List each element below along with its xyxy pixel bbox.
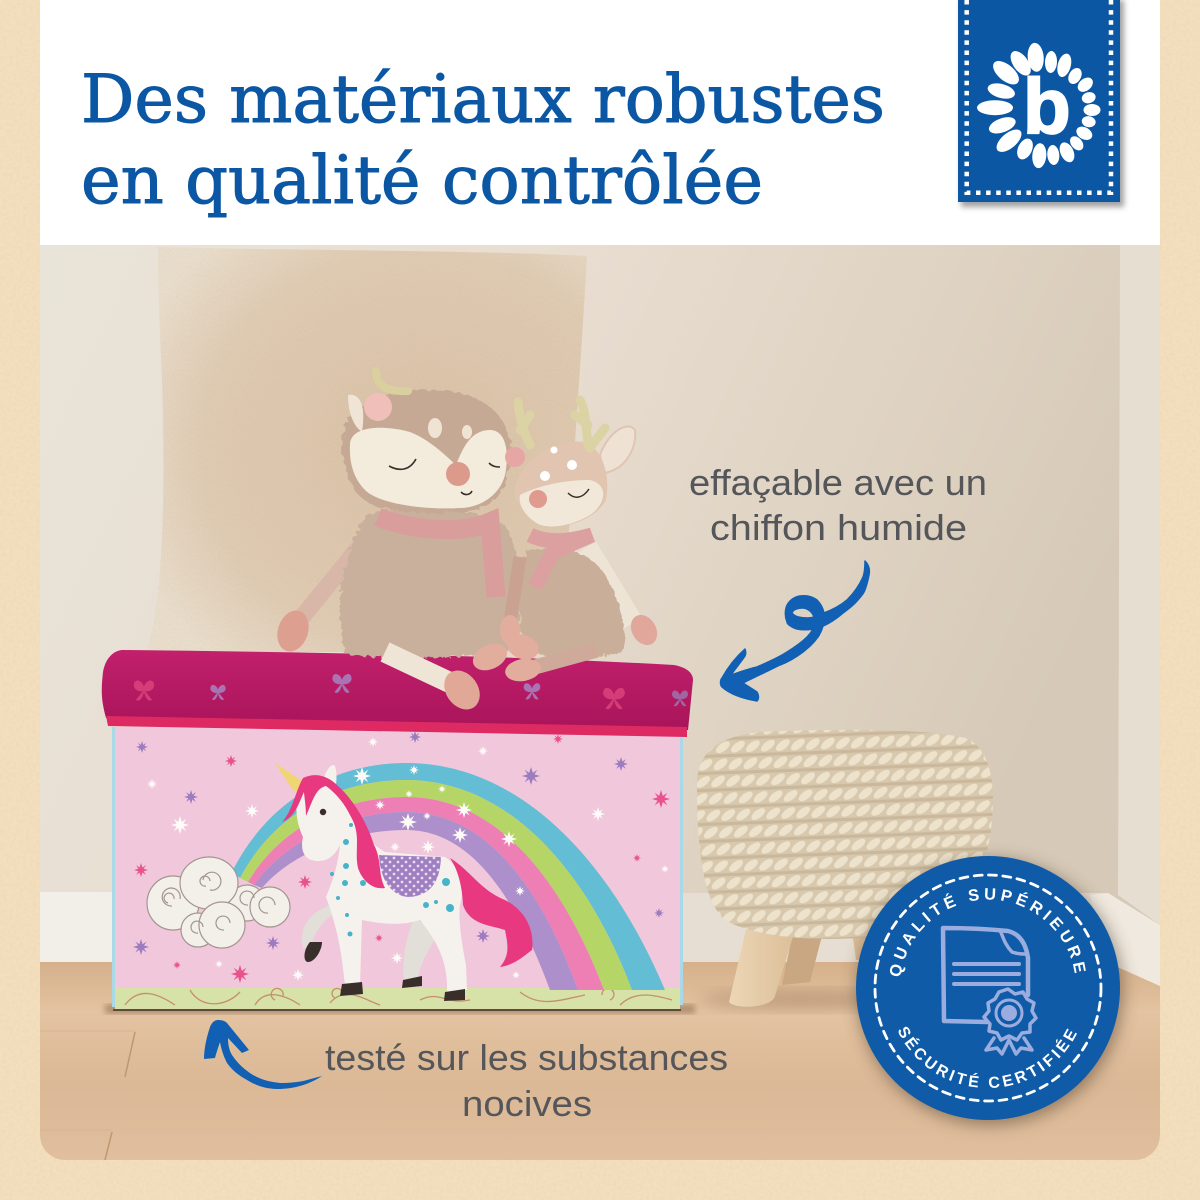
left ear (348, 395, 363, 432)
wall (40, 245, 1160, 965)
certificate icon (943, 928, 1036, 1054)
body (520, 548, 624, 658)
right side wall (1118, 245, 1160, 925)
ear (324, 765, 336, 784)
spots (540, 446, 577, 481)
body spots (330, 823, 454, 936)
butterflies (134, 674, 688, 709)
storage box (102, 650, 693, 1011)
title (81, 61, 885, 219)
feet (469, 615, 543, 684)
horn (275, 763, 302, 792)
scarf (378, 517, 496, 597)
logo letter b: b (1023, 62, 1071, 150)
side flower (505, 447, 525, 467)
left paw (277, 610, 309, 652)
box green ground strip (113, 988, 681, 1011)
cloud (147, 857, 290, 948)
right paw (626, 610, 662, 650)
tail (450, 858, 533, 967)
wooden floor (40, 962, 1160, 1160)
foot (444, 670, 480, 710)
skirting boards (40, 892, 1160, 986)
leg (385, 652, 455, 685)
mane (282, 775, 385, 888)
leg (535, 650, 597, 667)
dashed ring (875, 875, 1101, 1101)
stars (147, 737, 669, 981)
caption: wipeable: effaçable avec un (689, 462, 987, 503)
caption: tested: nocives (462, 1083, 592, 1124)
logo sunburst petals (977, 42, 1100, 169)
pouf stool (697, 730, 993, 1009)
right arm (587, 547, 633, 623)
lid trim (106, 716, 687, 737)
face (350, 428, 507, 508)
title: Des matériaux robustes (81, 61, 885, 138)
photo scene (40, 245, 1160, 1160)
unicorn body (296, 779, 467, 992)
badge text top: QUALITÉ SUPÉRIEURE (890, 888, 1086, 976)
stool legs (729, 925, 870, 1007)
head spots (428, 418, 472, 439)
quality badge shadow (857, 859, 1123, 1125)
left arm (296, 542, 354, 622)
head (342, 390, 511, 513)
arrow: towards box lid (720, 561, 869, 701)
caption: wipeable (689, 462, 987, 548)
box side slivers (112, 727, 115, 1007)
title: en qualité contrôlée (81, 142, 763, 219)
stool shadow (700, 991, 900, 1009)
quality badge (856, 856, 1120, 1120)
caption: wipeable: chiffon humide (710, 507, 967, 548)
large plush deer (272, 371, 525, 716)
saddle (379, 855, 441, 897)
far back leg (404, 920, 434, 980)
closed eyes (389, 459, 500, 495)
flower (364, 393, 392, 421)
body (340, 508, 521, 658)
logo tag (958, 0, 1124, 207)
eyes (568, 489, 589, 497)
muzzle (520, 480, 603, 526)
shadow under box (105, 1004, 695, 1014)
small plush deer (469, 400, 662, 684)
arrow: towards box base (204, 1020, 322, 1089)
left arm (510, 557, 520, 622)
knitted seat (697, 730, 993, 939)
eye (320, 809, 326, 815)
antlers (518, 400, 605, 448)
hooves (304, 942, 465, 1001)
far front leg (302, 906, 332, 948)
white header band (40, 0, 1160, 246)
antler (376, 371, 408, 391)
scarf (530, 535, 592, 587)
nose (529, 490, 547, 508)
caption: tested: testé sur les substances (325, 1037, 728, 1078)
head (515, 442, 607, 526)
pillow (140, 245, 590, 655)
badge text bottom: SÉCURITÉ CERTIFIÉE (898, 1026, 1077, 1088)
box front panel (115, 727, 680, 1010)
lid (102, 650, 693, 730)
ear (600, 426, 635, 473)
caption: tested (325, 1037, 728, 1124)
rainbow (232, 763, 665, 990)
nose (446, 462, 470, 486)
unicorn (275, 763, 533, 1001)
